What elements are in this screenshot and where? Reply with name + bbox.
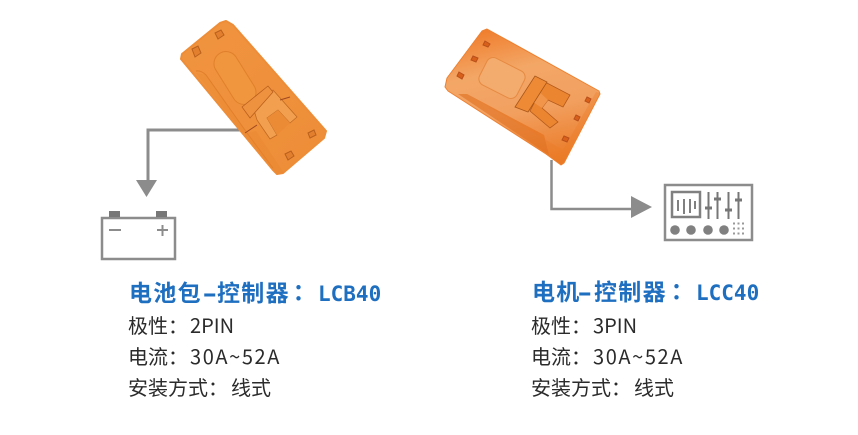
- heading: LCC40: 电机: [532, 273, 581, 307]
- icon: battery: [102, 211, 175, 259]
- heading: LCB40: LCB40: [318, 282, 381, 306]
- arrow: connector to controller: [552, 160, 652, 218]
- heading: LCB40: -: [199, 282, 220, 306]
- text block: LCC40 specifications: 极性：: [531, 310, 591, 339]
- text block: LCB40 specifications: 30A~52A: [190, 341, 281, 370]
- text block: LCB40 specifications: 极性：: [128, 310, 188, 339]
- text block: LCB40 specifications: 电流：: [128, 341, 188, 370]
- text block: LCC40 specifications: 3PIN: [593, 310, 637, 339]
- text block: LCC40 specifications: 线式: [634, 372, 674, 401]
- icon: LCB40 orange connector: [181, 21, 326, 174]
- icon: motor controller: [665, 185, 752, 240]
- text block: LCC40 specifications: 安装方式：: [531, 372, 631, 401]
- heading: LCC40: 控制器: [594, 273, 667, 307]
- text block: LCC40 specifications: 30A~52A: [593, 341, 684, 370]
- heading: LCB40: ：: [287, 274, 310, 308]
- heading: LCC40: LCC40: [696, 281, 759, 305]
- heading: LCB40: 电池包: [129, 274, 202, 308]
- heading: LCC40: [532, 273, 759, 307]
- icon: LCC40 orange connector: [445, 29, 600, 165]
- text block: LCC40 specifications: [531, 273, 759, 401]
- text block: LCC40 specifications: 电流：: [531, 341, 591, 370]
- heading: LCB40: 控制器: [217, 274, 290, 308]
- text block: LCB40 specifications: [128, 274, 381, 401]
- heading: LCC40: -: [574, 281, 595, 305]
- text block: LCB40 specifications: 安装方式：: [128, 372, 228, 401]
- text block: LCB40 specifications: 线式: [231, 372, 271, 401]
- arrow: connector to battery: [136, 130, 248, 197]
- heading: LCB40: [129, 274, 381, 308]
- text block: LCB40 specifications: 2PIN: [190, 310, 234, 339]
- heading: LCC40: ：: [665, 273, 688, 307]
